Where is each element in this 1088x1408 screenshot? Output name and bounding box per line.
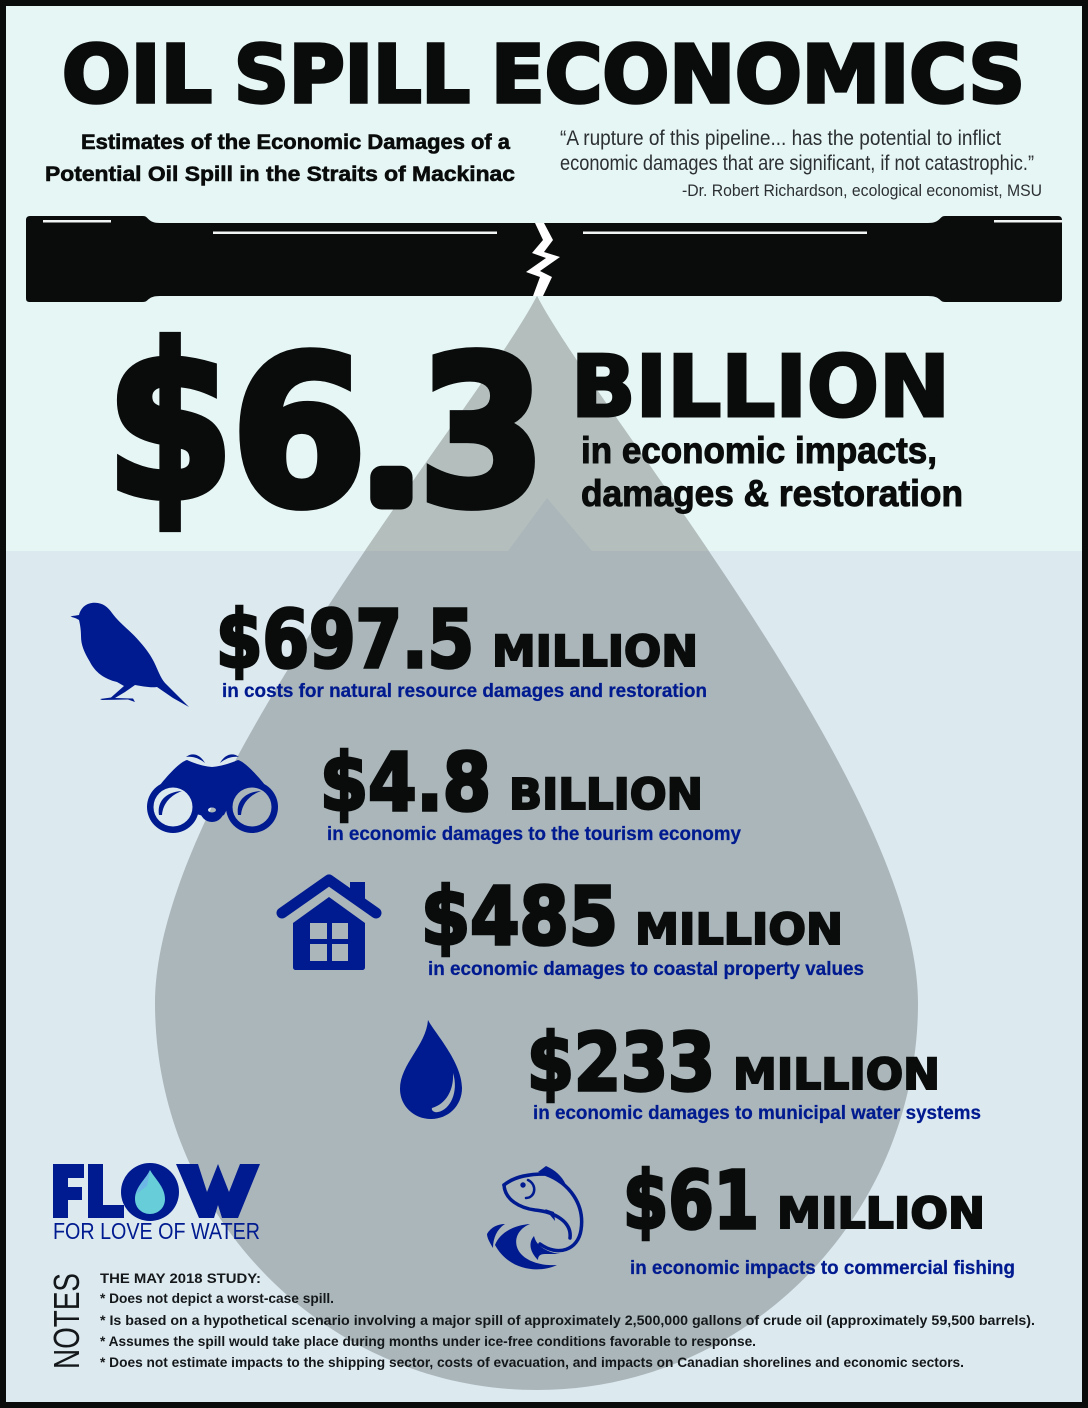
- broken pipeline: [26, 216, 1062, 302]
- notes label: NOTES: [46, 1273, 87, 1369]
- title: SPILL: [234, 29, 470, 121]
- subtitle: Estimates of the Economic Damages of a: [81, 131, 510, 154]
- description: in economic damages to the tourism economy: [327, 823, 741, 845]
- icon: water drop: [400, 1020, 462, 1119]
- item: tourism: [147, 748, 741, 844]
- title: ECONOMICS: [491, 29, 1025, 121]
- headline total: [106, 300, 963, 553]
- quote: -Dr. Robert Richardson, ecological economist, MSU: [682, 181, 1042, 200]
- quote: [560, 127, 1042, 200]
- icon: fish: [487, 1166, 582, 1269]
- value: $61: [623, 1155, 759, 1247]
- headline total: 6: [231, 313, 367, 553]
- notes text: * Does not depict a worst-case spill.: [100, 1291, 334, 1306]
- notes text: [100, 1270, 1035, 1370]
- logo: FLOW: FOR LOVE OF WATER: [53, 1218, 260, 1244]
- unit: BILLION: [509, 770, 703, 820]
- item: municipal water: [400, 1017, 981, 1124]
- title: OIL: [62, 29, 212, 121]
- icon: house: [282, 880, 376, 970]
- subtitle: Potential Oil Spill in the Straits of Mackinac: [45, 163, 515, 186]
- headline total: damages & restoration: [581, 473, 963, 514]
- description: in costs for natural resource damages and restoration: [222, 680, 707, 702]
- title: [62, 29, 1025, 121]
- icon: bird: [70, 603, 189, 707]
- headline total: in economic impacts,: [581, 430, 937, 471]
- value: $233: [527, 1017, 715, 1109]
- value: $4.8: [320, 737, 491, 829]
- headline total: .: [370, 396, 412, 524]
- item: coastal property: [282, 871, 864, 980]
- quote: “A rupture of this pipeline... has the potential to inflict: [560, 127, 1001, 150]
- headline total: 3: [418, 313, 546, 553]
- icon: binoculars: [147, 754, 278, 833]
- headline total: $: [106, 300, 234, 547]
- item: natural resources: [70, 594, 707, 707]
- value: $485: [421, 871, 618, 963]
- notes text: * Does not estimate impacts to the shipping sector, costs of evacuation, and impacts on Canadian shorelines and economic sectors.: [100, 1355, 964, 1370]
- description: in economic impacts to commercial fishing: [630, 1257, 1015, 1279]
- logo: FLOW: [53, 1163, 260, 1244]
- notes text: THE MAY 2018 STUDY:: [100, 1270, 261, 1286]
- notes text: * Is based on a hypothetical scenario involving a major spill of approximately 2,500,000 gallons of crude oil (approximately 59,500 barrels).: [100, 1313, 1035, 1328]
- unit: MILLION: [777, 1189, 985, 1239]
- description: in economic damages to municipal water systems: [533, 1102, 981, 1124]
- headline total: BILLION: [571, 338, 950, 437]
- unit: MILLION: [492, 627, 698, 677]
- notes text: * Assumes the spill would take place during months under ice-free conditions favorable to response.: [100, 1334, 756, 1349]
- value: $697.5: [216, 594, 474, 686]
- large oil drop background: [155, 296, 918, 1390]
- unit: MILLION: [733, 1050, 940, 1100]
- item: commercial fishing: [487, 1155, 1015, 1279]
- description: in economic damages to coastal property values: [428, 958, 864, 980]
- subtitle: [45, 131, 515, 186]
- unit: MILLION: [635, 905, 843, 955]
